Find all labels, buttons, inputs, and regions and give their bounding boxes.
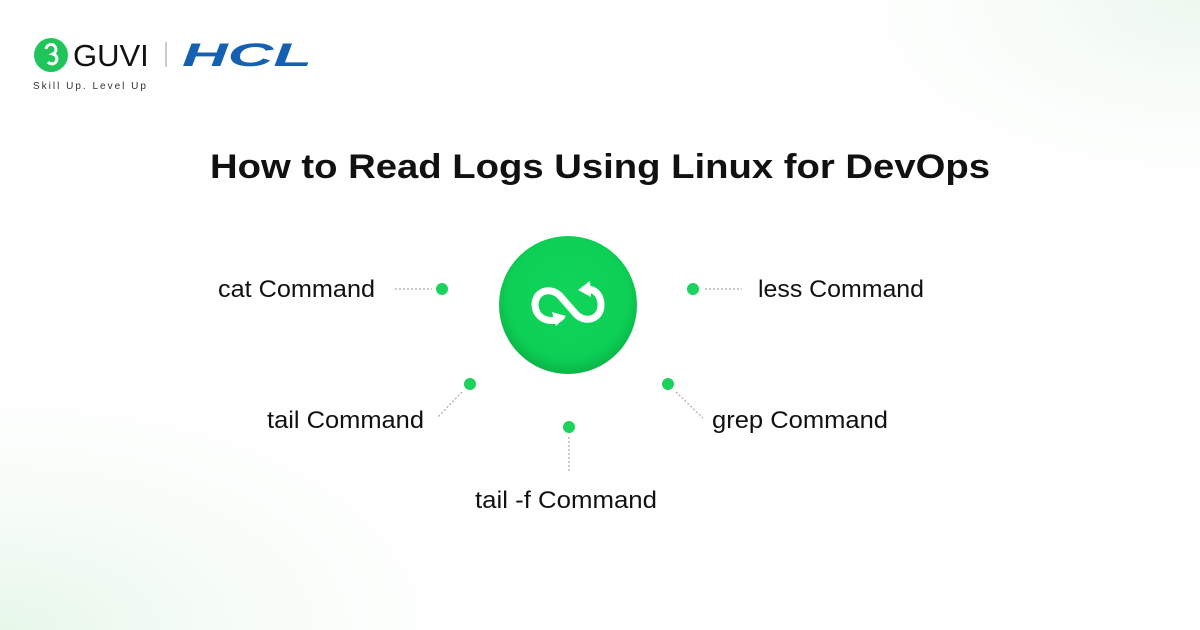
- logo: GUVI HCL: [33, 37, 312, 92]
- logo: GUVI HCL: GUVI: [73, 38, 149, 73]
- icon: infinity arrows: [535, 281, 601, 326]
- item: grep Command: [662, 378, 888, 434]
- item: cat Command: [218, 276, 448, 303]
- item: cat Command: cat Command: [218, 276, 375, 303]
- item: tail Command: tail Command: [267, 407, 424, 434]
- logo: GUVI HCL: Skill Up. Level Up: [33, 81, 148, 92]
- title: How to Read Logs Using Linux for DevOps: [210, 148, 990, 186]
- icon: guvi circle: [34, 38, 68, 72]
- item: tail Command: [267, 378, 476, 434]
- center circle icon: [499, 236, 637, 374]
- logo: GUVI HCL: HCL: [182, 37, 312, 73]
- item: less Command: [687, 276, 924, 303]
- item: tail -f Command: tail -f Command: [475, 487, 657, 514]
- item: tail -f Command: [475, 421, 657, 514]
- item: grep Command: grep Command: [712, 407, 888, 434]
- item: less Command: less Command: [758, 276, 924, 303]
